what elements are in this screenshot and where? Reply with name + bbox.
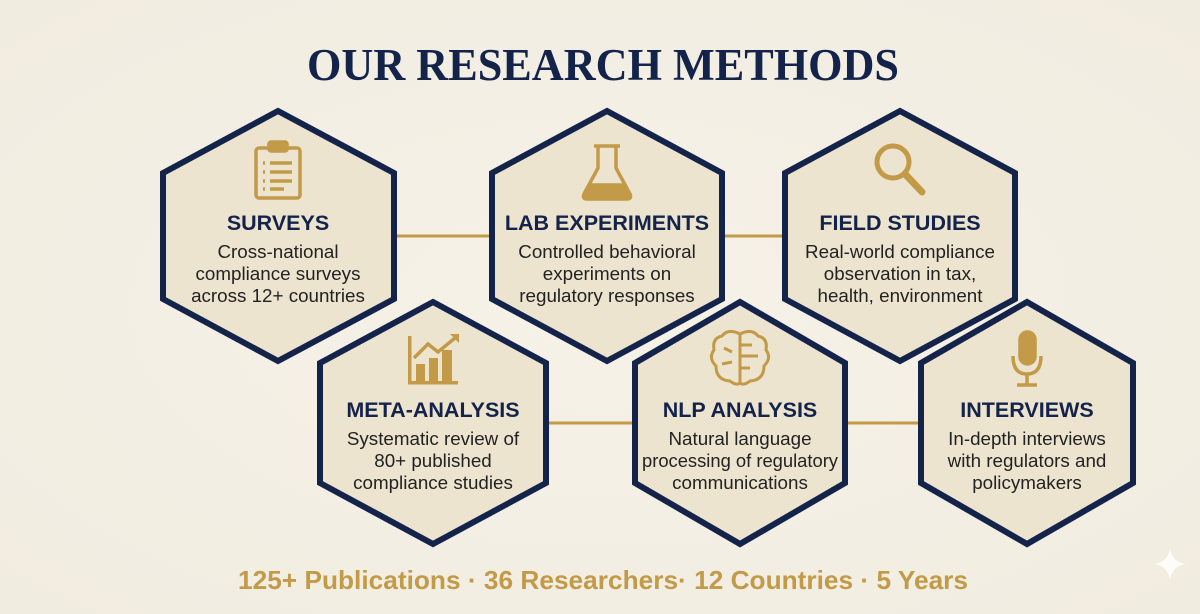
footer stats: 125+ Publications · 36 Researchers· 12 Countries · 5 Years [238,565,968,595]
icon: bar chart [408,334,459,384]
panel: meta-analysis: 80+ published [374,450,492,471]
panel: field studies: FIELD STUDIES [819,211,981,235]
icon: sparkle [1154,548,1186,580]
panel: lab experiments: LAB EXPERIMENTS [505,211,709,235]
panel: nlp analysis [635,302,845,544]
panel: field studies: health, environment [818,285,983,306]
panel: meta-analysis: META-ANALYSIS [346,398,520,422]
panel: nlp analysis: processing of regulatory [642,450,839,471]
icon: brain [711,331,769,384]
panel: surveys: SURVEYS [227,211,329,235]
panel: surveys: across 12+ countries [191,285,365,306]
title: OUR RESEARCH METHODS [307,40,899,90]
panel: field studies: Real-world compliance [805,241,995,262]
connector lines [393,236,922,423]
panel: interviews: In-depth interviews [948,428,1106,449]
panel: field studies: observation in tax, [824,263,976,284]
panel: lab experiments [492,111,722,361]
icon: clipboard [256,142,300,198]
panel: interviews: policymakers [972,472,1082,493]
panel: interviews [921,302,1133,544]
panel: meta-analysis [320,302,546,544]
panel: surveys: Cross-national [217,241,339,262]
panel: surveys [163,111,394,361]
panel: lab experiments: Controlled behavioral [518,241,696,262]
panel: interviews: INTERVIEWS [960,398,1094,422]
panel: nlp analysis: NLP ANALYSIS [663,398,817,422]
panel: nlp analysis: Natural language [668,428,812,449]
panel: surveys: compliance surveys [196,263,360,284]
icon: magnifier [877,146,922,192]
icon: flask [583,146,631,199]
panel: meta-analysis: compliance studies [353,472,513,493]
panel: field studies [785,111,1015,361]
panel: interviews: with regulators and [947,450,1106,471]
panel: lab experiments: experiments on [543,263,671,284]
panel: meta-analysis: Systematic review of [347,428,520,449]
panel: nlp analysis: communications [672,472,808,493]
panel: lab experiments: regulatory responses [519,285,695,306]
icon: microphone [1013,332,1041,385]
